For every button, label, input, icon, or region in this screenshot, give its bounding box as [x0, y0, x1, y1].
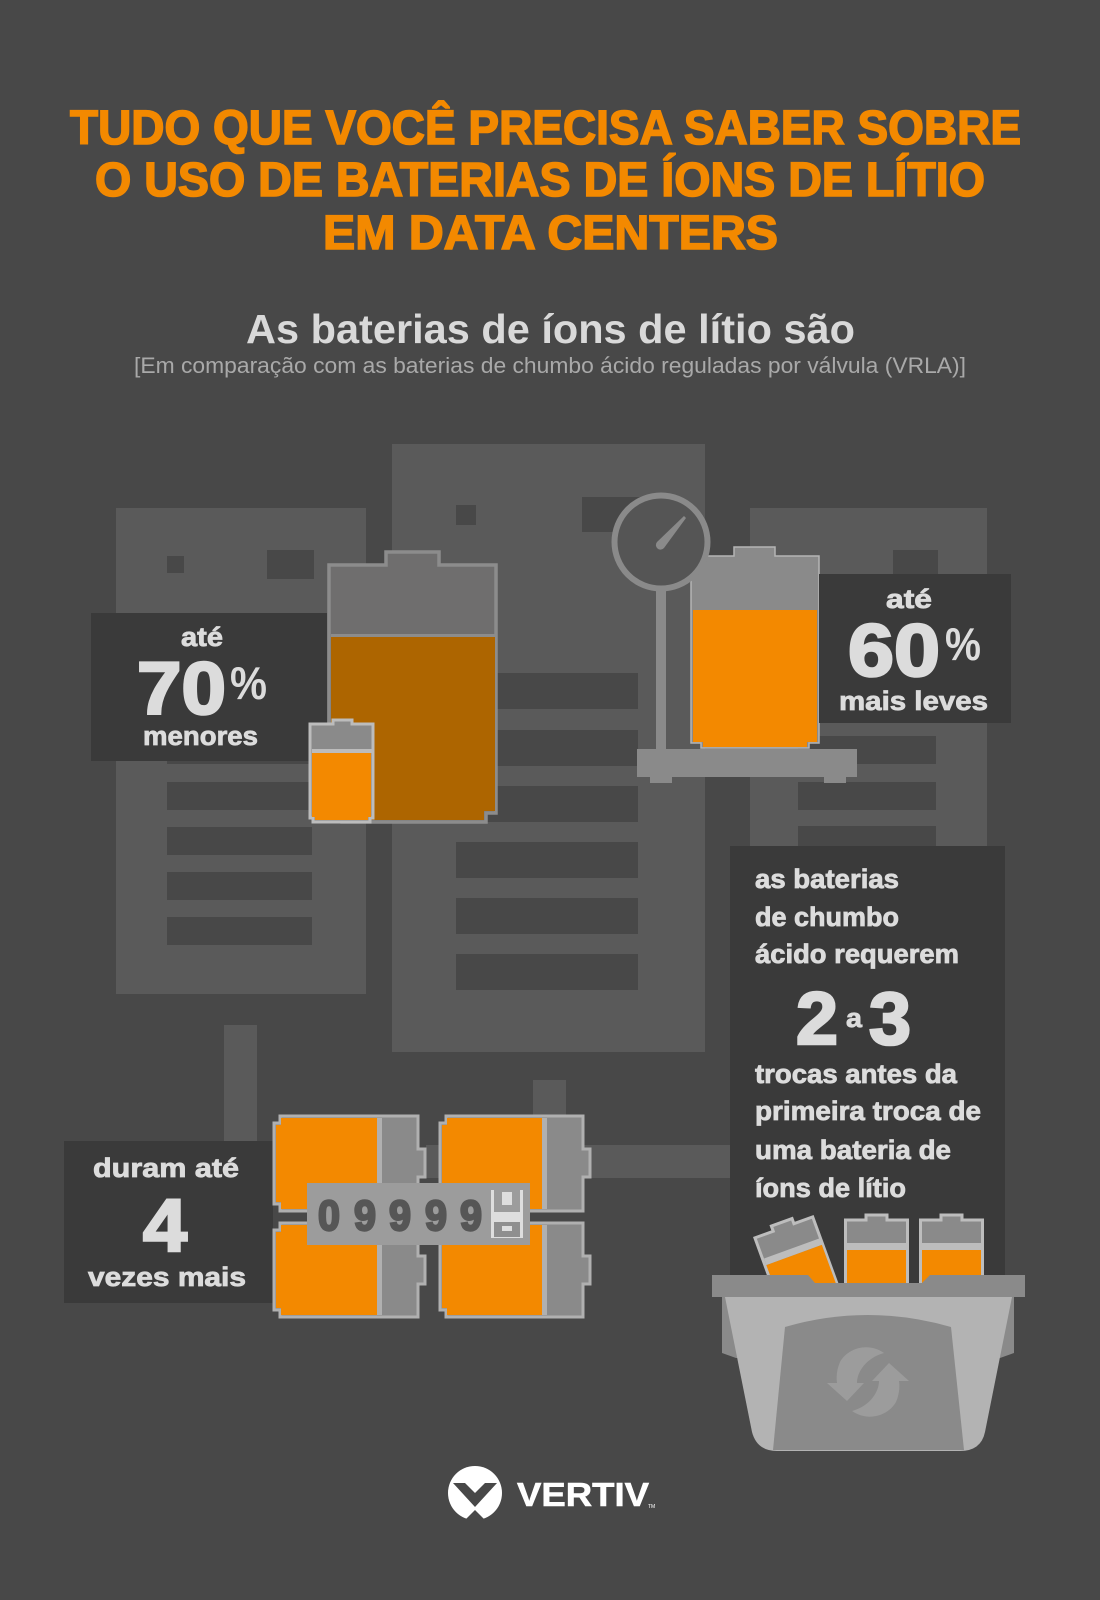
- panel: 70% smaller: menores: [143, 721, 258, 751]
- panel: 70% smaller: 70: [137, 647, 226, 730]
- panel: lead-acid replacements: íons de lítio: [755, 1173, 906, 1203]
- panel: lead-acid replacements: 2: [796, 977, 838, 1060]
- logo: Vertiv: [448, 1466, 655, 1526]
- logo: Vertiv: VERTIV: [517, 1476, 649, 1513]
- panel: 60% lighter: até: [886, 584, 932, 614]
- panel: lasts 4 times longer: vezes mais: [88, 1262, 246, 1292]
- icon: large lead-acid battery: [329, 552, 496, 822]
- panel: 70% smaller: %: [230, 657, 267, 709]
- icon: recycle arrows: [827, 1347, 909, 1417]
- subtitle: As baterias de íons de lítio são: [246, 306, 855, 352]
- panel: lead-acid replacements: ácido requerem: [755, 939, 959, 969]
- background: server racks and connectors: [116, 444, 987, 1178]
- cycle counter: 9: [425, 1192, 447, 1240]
- cycle counter: 0: [318, 1192, 340, 1240]
- title: [70, 100, 1021, 260]
- panel: lead-acid replacements: uma bateria de: [755, 1135, 951, 1165]
- panel: 60% lighter: 60: [848, 609, 940, 692]
- panel: 60% lighter: %: [945, 618, 981, 670]
- logo: Vertiv: TM: [648, 1504, 655, 1510]
- panel: 70% smaller: [91, 613, 327, 761]
- cycle counter: 9: [389, 1192, 411, 1240]
- panel: 60% lighter: [819, 574, 1011, 723]
- cycle counter: 9: [354, 1192, 376, 1240]
- icon: weighing scale with battery: [614, 496, 857, 783]
- panel: lasts 4 times longer: 4: [143, 1184, 187, 1267]
- panel: lead-acid replacements: primeira troca de: [755, 1096, 981, 1126]
- icon: discarded batteries: [753, 1212, 982, 1321]
- panel: lasts 4 times longer: [64, 1141, 273, 1303]
- title: EM DATA CENTERS: [323, 207, 778, 260]
- panel: lead-acid replacements: de chumbo: [755, 902, 899, 932]
- panel: lead-acid replacements: 3: [869, 977, 911, 1060]
- icon: small lithium battery: [310, 720, 373, 822]
- panel: 70% smaller: até: [181, 622, 223, 652]
- panel: lead-acid replacements: as baterias: [755, 864, 899, 894]
- panel: 60% lighter: mais leves: [839, 686, 988, 716]
- icon: four batteries with cycle counter: [274, 1116, 590, 1317]
- cycle counter: 9: [460, 1192, 482, 1240]
- panel: lead-acid replacements: [730, 846, 1005, 1286]
- title: O USO DE BATERIAS DE ÍONS DE LÍTIO: [95, 153, 985, 207]
- panel: lasts 4 times longer: duram até: [93, 1153, 239, 1183]
- panel: lead-acid replacements: trocas antes da: [755, 1059, 958, 1089]
- icon: recycling bin: [712, 1275, 1025, 1451]
- cycle counter: [307, 1183, 530, 1245]
- comparison note: [Em comparação com as baterias de chumbo ácido reguladas por válvula (VRLA)]: [134, 353, 966, 378]
- panel: lead-acid replacements: a: [846, 1003, 863, 1033]
- title: TUDO QUE VOCÊ PRECISA SABER SOBRE: [70, 100, 1021, 155]
